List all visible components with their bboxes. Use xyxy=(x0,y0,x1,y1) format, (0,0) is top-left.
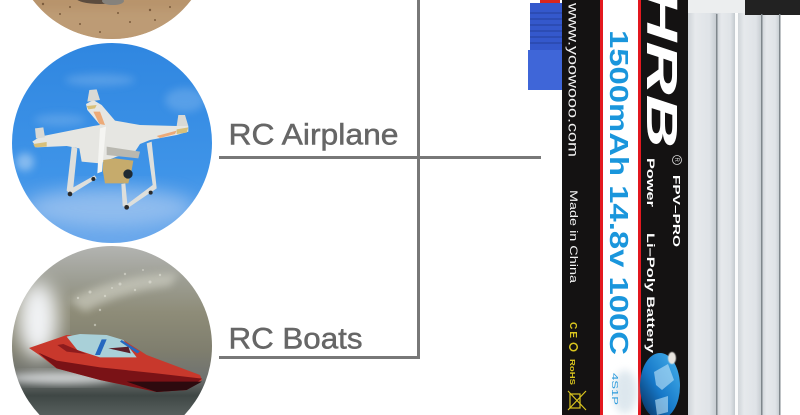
battery label xyxy=(562,0,688,415)
battery cells xyxy=(687,0,800,415)
power text: Power xyxy=(644,158,656,208)
globe logo xyxy=(640,352,680,415)
registered mark xyxy=(672,156,682,164)
website text: www.yoowooo.com xyxy=(566,2,582,157)
made in china text: Made in China xyxy=(567,190,579,284)
connector lines xyxy=(219,0,541,359)
compliance marks: CE xyxy=(567,322,578,338)
fpv-pro text: FPV–PRO xyxy=(670,175,681,247)
drone xyxy=(32,89,188,210)
xt60 connector xyxy=(528,0,562,90)
compliance marks: RoHS xyxy=(568,359,577,385)
label: rc boats: RC Boats xyxy=(228,322,362,356)
boat xyxy=(29,334,202,392)
photo: drone in sky xyxy=(10,40,214,246)
li-poly battery text: Li–Poly Battery xyxy=(644,233,656,354)
4s1p text: 4S1P xyxy=(610,373,619,405)
registered mark: R xyxy=(673,158,679,162)
label: rc airplane: RC Airplane xyxy=(228,118,398,152)
photo: rc boat on water xyxy=(10,244,214,415)
photo: rc car on sand xyxy=(32,0,192,39)
capacity text: 1500mAh 14.8v 100C xyxy=(604,30,634,355)
compliance marks xyxy=(567,322,586,410)
